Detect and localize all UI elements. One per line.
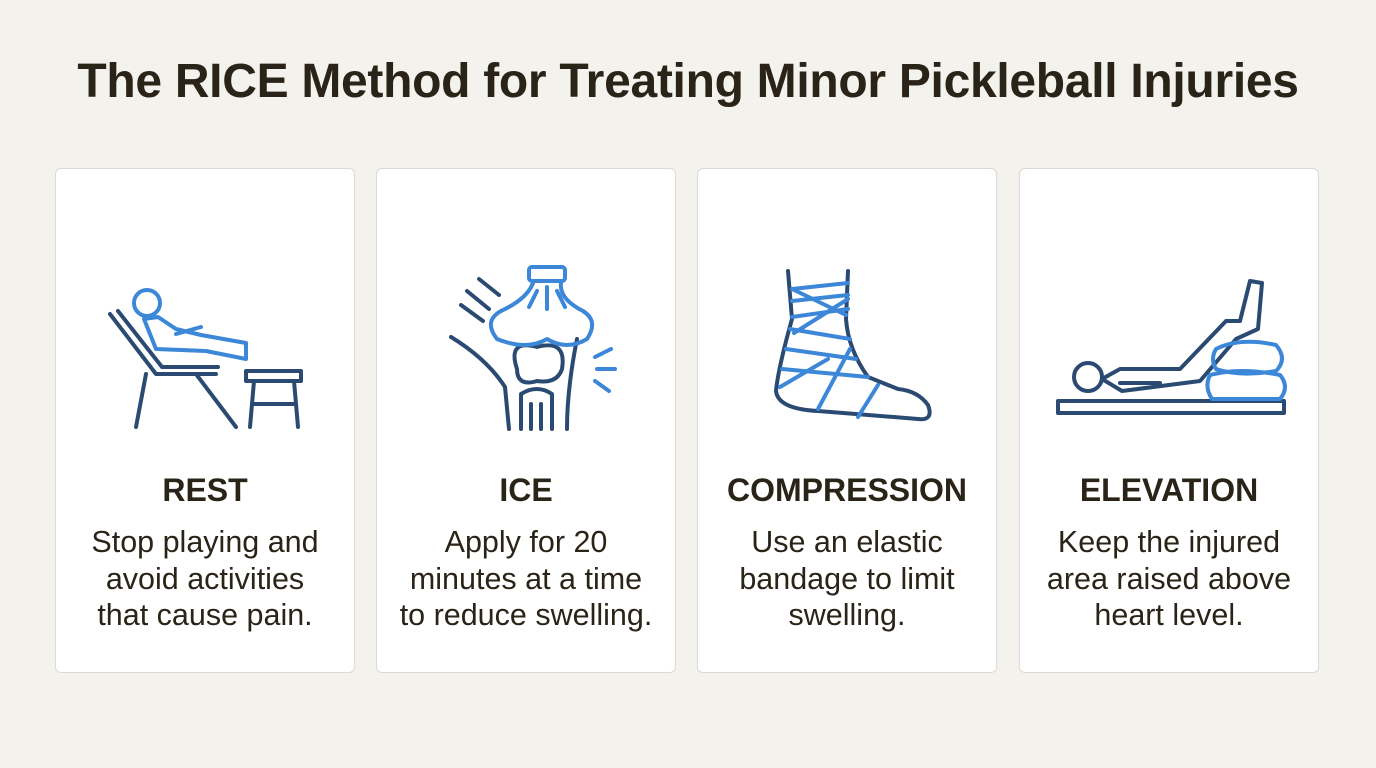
icon: ice pack on knee (448, 265, 617, 431)
heading: rest: REST (162, 472, 248, 508)
text: compression: bandage to limit (739, 562, 955, 596)
heading: ice: ICE (499, 472, 553, 508)
icon: elevated leg on pillows (1056, 279, 1288, 415)
text: ice (400, 525, 652, 632)
text: rest: that cause pain. (97, 598, 313, 632)
text: ice: minutes at a time (410, 562, 642, 596)
heading: compression: COMPRESSION (727, 472, 967, 508)
icon: reclining person (108, 288, 303, 430)
panel: rest (55, 168, 355, 673)
panel: ice (376, 168, 676, 673)
title: The RICE Method for Treating Minor Pickleball Injuries (77, 55, 1299, 108)
text: rest (91, 525, 319, 632)
text: rest: Stop playing and (91, 525, 319, 559)
panel: elevation (1019, 168, 1319, 673)
panel: compression (697, 168, 997, 673)
text: elevation: heart level. (1094, 598, 1244, 632)
text: ice: to reduce swelling. (400, 598, 652, 632)
text: compression: Use an elastic (751, 525, 943, 559)
text: elevation: area raised above (1047, 562, 1291, 596)
text: rest: avoid activities (106, 562, 304, 596)
text: compression (739, 525, 955, 632)
text: ice: Apply for 20 (445, 525, 607, 559)
icon: bandaged foot (774, 269, 932, 422)
text: elevation (1047, 525, 1291, 632)
heading: elevation: ELEVATION (1080, 472, 1258, 508)
text: elevation: Keep the injured (1058, 525, 1280, 559)
text: compression: swelling. (789, 598, 905, 632)
